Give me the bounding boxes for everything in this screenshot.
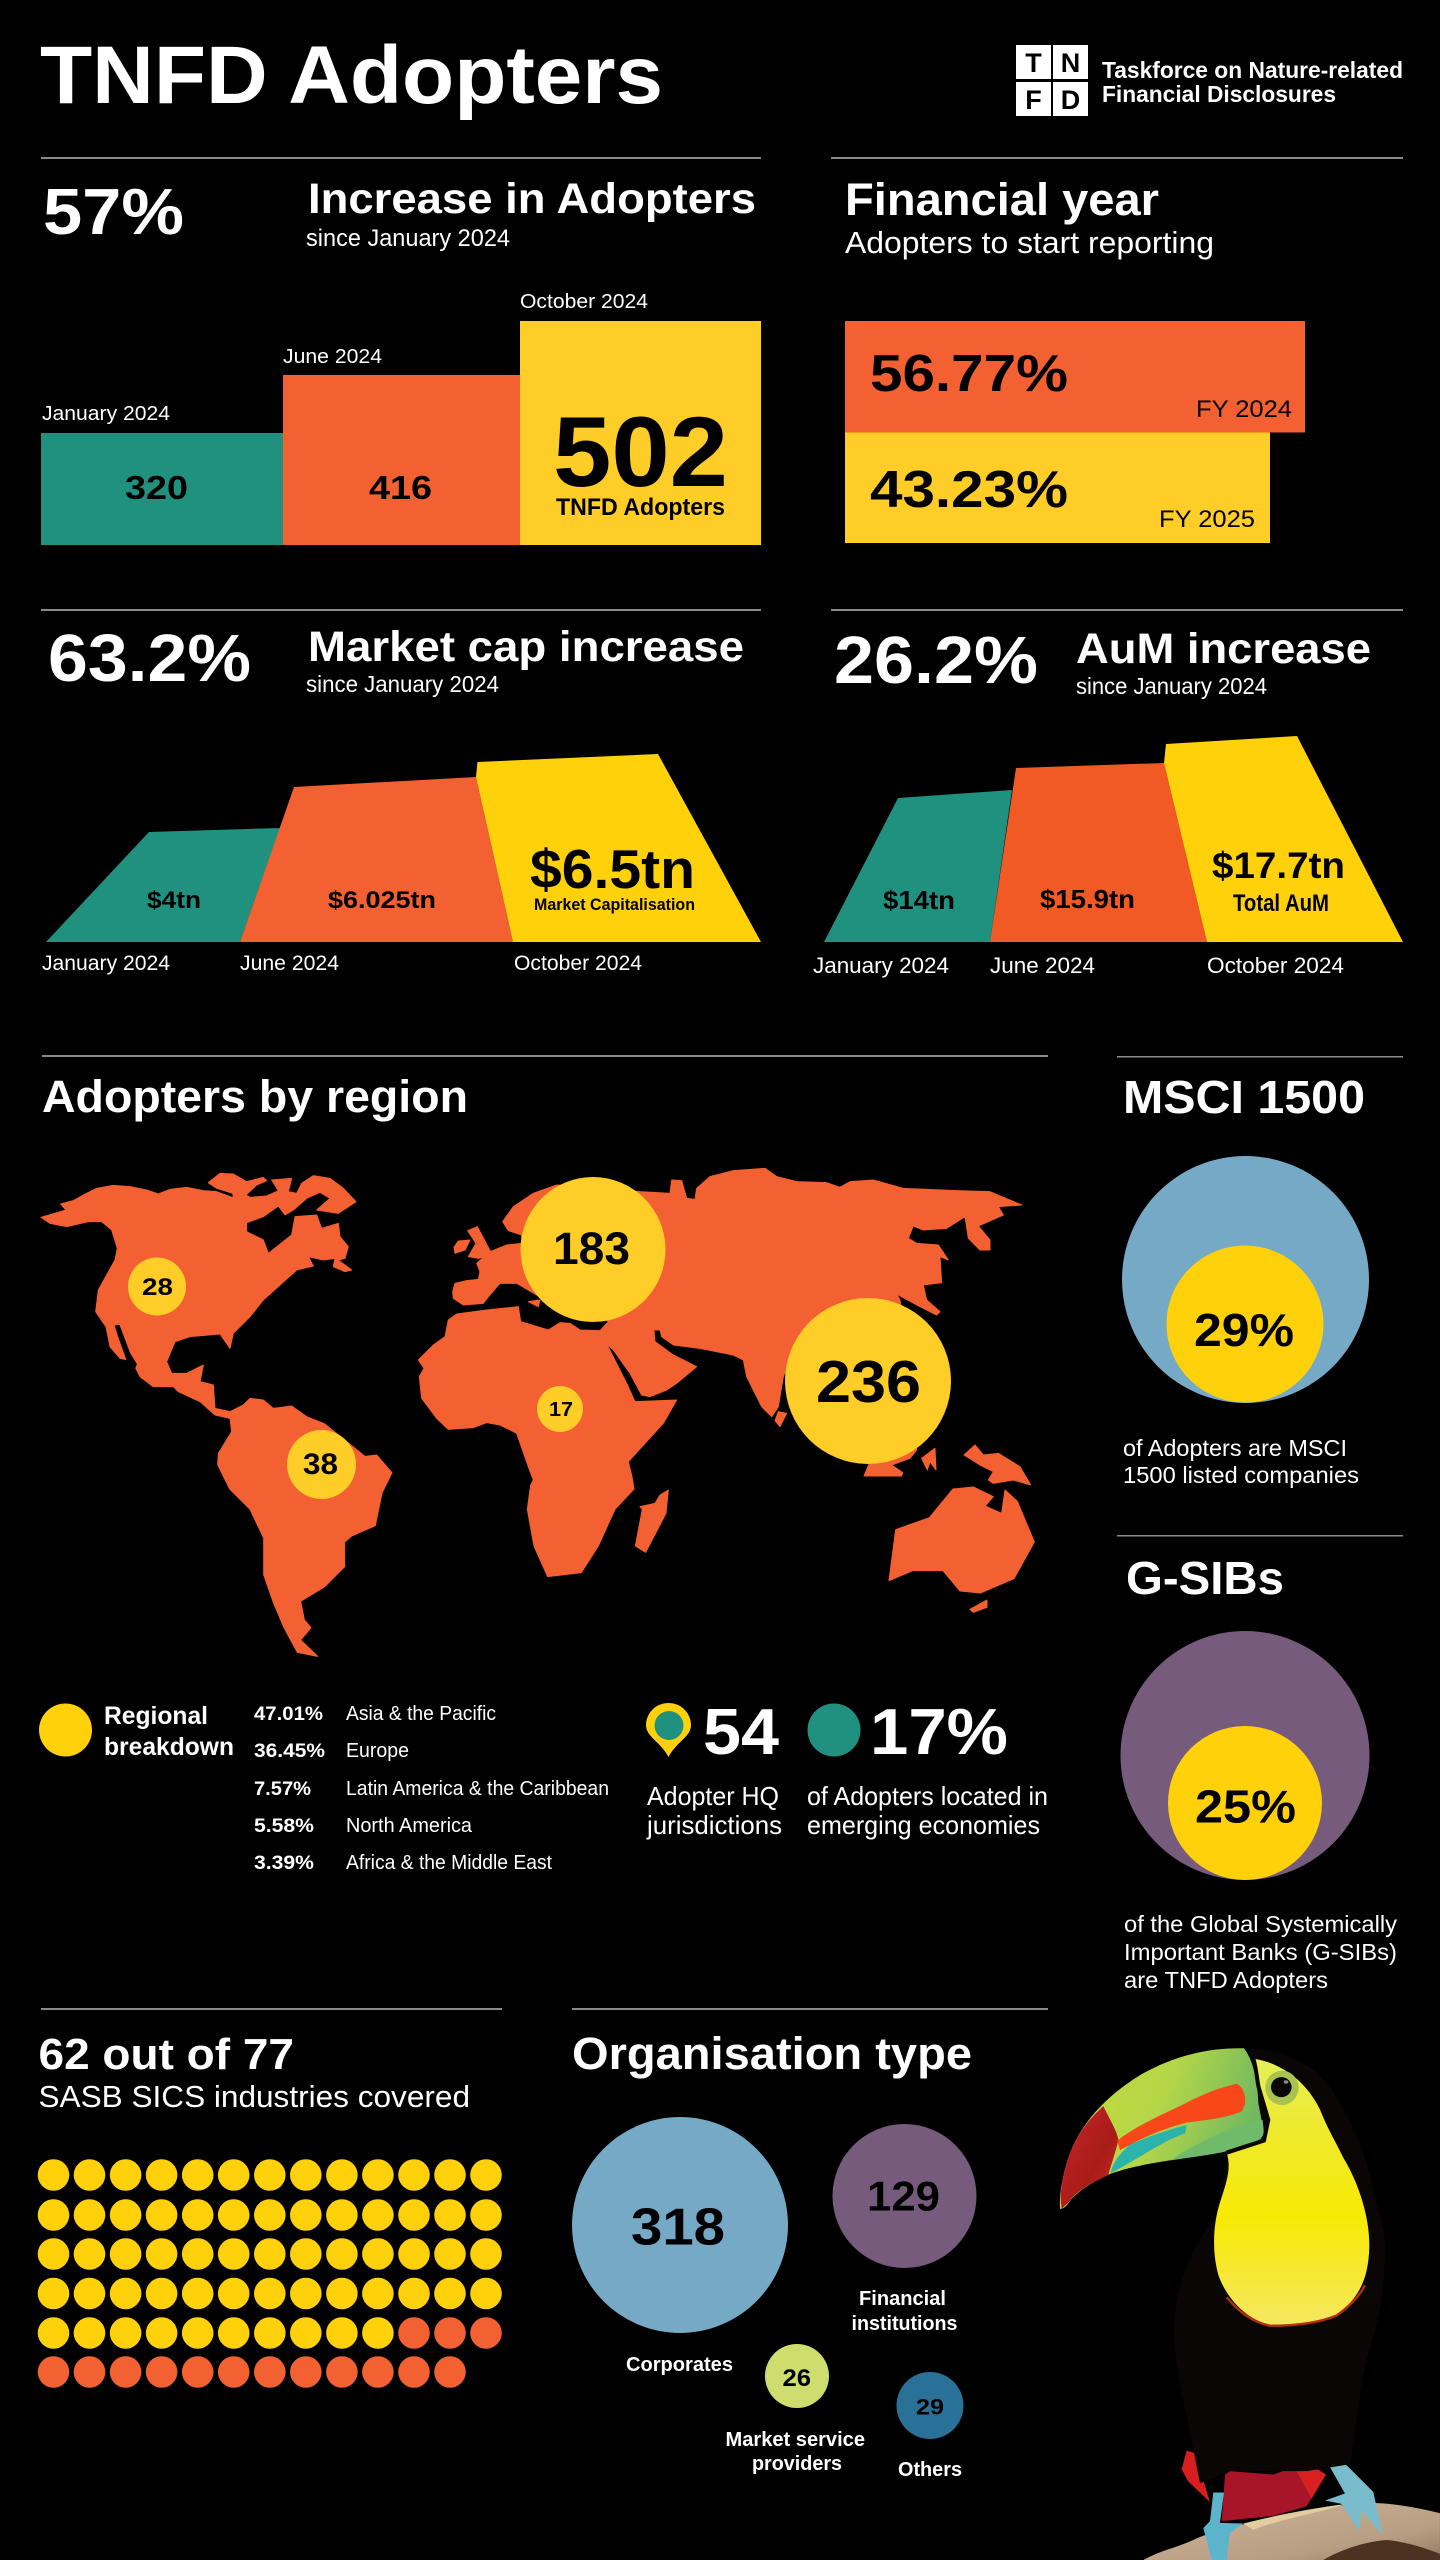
- bubble: market service providers: 26: [782, 2365, 811, 2392]
- bar: October 2024: [520, 291, 761, 545]
- bar: January 2024: January 2024: [42, 403, 170, 425]
- panel: increase in adopters: [41, 175, 761, 545]
- shape: October AuM: Total AuM: [1233, 890, 1329, 917]
- shape: October market cap: $6.5tn: [530, 838, 695, 900]
- list: region percentages: Africa & the Middle East: [346, 1852, 552, 1874]
- stat: adopter HQ jurisdictions: [646, 1695, 782, 1840]
- dot grid: 62 of 77: [38, 2159, 502, 2388]
- nested circles: 25%: 25%: [1195, 1780, 1296, 1832]
- bubble: Europe 183: 183: [553, 1223, 630, 1274]
- logo: TNFD: N: [1061, 48, 1080, 78]
- bar: FY 2025: [845, 432, 1270, 543]
- bar: June 2024: June 2024: [283, 346, 382, 368]
- map: Africa and islands: [418, 1227, 677, 1577]
- list: region percentages: [254, 1703, 609, 1874]
- shape: October AuM: [1164, 736, 1403, 942]
- panel: AuM increase: [813, 623, 1403, 978]
- title: TNFD Adopters: [40, 30, 663, 121]
- caption: [1123, 1435, 1359, 1488]
- axis labels: June 2024: [990, 953, 1095, 978]
- bubble: corporates: [572, 2117, 788, 2376]
- bubble: market service providers: Market service: [726, 2429, 865, 2451]
- shape: October market cap: Market Capitalisation: [534, 895, 695, 914]
- axis labels: [42, 952, 642, 975]
- caption: [807, 1781, 1048, 1840]
- axis labels: October 2024: [1207, 953, 1344, 978]
- caption: of Adopters located in: [807, 1781, 1048, 1811]
- subheading: SASB SICS industries covered: [38, 2079, 470, 2114]
- bar: FY 2025: FY 2025: [1159, 506, 1255, 533]
- heading: adopters by region: Adopters by region: [42, 1071, 468, 1122]
- heading: AuM increase: AuM increase: [1076, 625, 1371, 673]
- toucan bib: [1214, 2059, 1369, 2325]
- number: 17%: 17%: [870, 1695, 1008, 1768]
- bar: January 2024: 320: [125, 469, 188, 506]
- shape: October AuM: $17.7tn: [1212, 845, 1345, 886]
- bar: FY 2024: 56.77%: [870, 345, 1068, 403]
- subheading: adopters to start reporting: Adopters to start reporting: [845, 225, 1214, 260]
- bubble: Africa 17: [537, 1386, 583, 1432]
- list: region percentages: Asia & the Pacific: [346, 1703, 496, 1725]
- bar: June 2024: 416: [369, 469, 432, 506]
- caption: of the Global Systemically: [1124, 1911, 1398, 1937]
- heading: 62 out of 77: [38, 2030, 294, 2079]
- bubble: market service providers: providers: [752, 2453, 842, 2475]
- nested circles: 25%: [1120, 1631, 1370, 1880]
- stat: 26.2%: 26.2%: [834, 623, 1038, 698]
- bar: June 2024: [283, 346, 520, 545]
- caption: [1124, 1911, 1398, 1993]
- bubble: market service providers: [726, 2344, 865, 2475]
- caption: 1500 listed companies: [1123, 1462, 1359, 1488]
- icon: teal dot: [808, 1704, 860, 1756]
- shape: January AuM: [824, 790, 1012, 942]
- axis labels: June 2024: [240, 952, 339, 975]
- legend: regional breakdown: [39, 1702, 609, 1874]
- shape: June AuM: [990, 763, 1207, 942]
- number: 54: 54: [703, 1695, 779, 1768]
- caption: [646, 1781, 782, 1840]
- nested circles: 29%: [1122, 1156, 1369, 1403]
- list: region percentages: Latin America & the Caribbean: [346, 1778, 609, 1800]
- list: region percentages: 36.45%: [254, 1741, 325, 1762]
- bubble: Africa 17: 17: [549, 1399, 573, 1421]
- bubble: Europe 183: [520, 1177, 666, 1322]
- bar: FY 2024: [845, 321, 1305, 432]
- logo: TNFD: [1016, 45, 1403, 116]
- illustration: toucan: [1060, 2048, 1440, 2560]
- shape: January market cap: $4tn: [147, 887, 201, 914]
- panel: SASB SICS industries: [38, 2030, 502, 2388]
- heading: MSCI 1500: [1123, 1071, 1365, 1123]
- caption: jurisdictions: [646, 1810, 782, 1840]
- bubble: others: 29: [916, 2394, 944, 2420]
- axis labels: January 2024: [42, 952, 170, 975]
- heading: G-SIBs: [1126, 1552, 1284, 1604]
- map: Americas: [41, 1173, 392, 1656]
- toucan bill: [1060, 2048, 1264, 2209]
- legend title: breakdown: [104, 1733, 234, 1761]
- list: region percentages: 7.57%: [254, 1779, 311, 1800]
- shape: January market cap: [46, 828, 280, 942]
- heading: market cap increase: Market cap increase: [308, 623, 744, 671]
- toucan eye: [1265, 2071, 1299, 2105]
- map: Eurasia and Oceania: [453, 1168, 1034, 1612]
- bubble: others: [896, 2372, 964, 2481]
- bubble: others: Others: [898, 2459, 962, 2481]
- subheading: since January 2024: since January 2024: [1076, 673, 1267, 699]
- list: region percentages: North America: [346, 1815, 473, 1837]
- bubble: North America 28: [128, 1258, 186, 1316]
- logo: TNFD: T: [1025, 48, 1042, 78]
- bar: October 2024: 502: [553, 396, 728, 507]
- logo: TNFD: D: [1061, 85, 1080, 115]
- heading: Organisation type: [572, 2028, 972, 2079]
- stat: 57%: 57%: [43, 175, 184, 248]
- caption: Adopter HQ: [647, 1781, 779, 1811]
- list: region percentages: 47.01%: [254, 1704, 323, 1725]
- heading: increase in adopters: Increase in Adopters: [308, 175, 756, 223]
- caption: Important Banks (G-SIBs): [1124, 1939, 1397, 1965]
- bubble: Asia Pacific 236: 236: [816, 1349, 921, 1415]
- legend title: Regional: [104, 1702, 208, 1730]
- bubble: financial institutions: institutions: [852, 2313, 958, 2335]
- panel: market cap increase: [42, 621, 761, 975]
- bubble: financial institutions: Financial: [859, 2288, 946, 2310]
- bubble: Latin America 38: [287, 1430, 356, 1499]
- shape: January AuM: $14tn: [883, 885, 955, 915]
- bubble: Latin America 38: 38: [303, 1448, 338, 1481]
- list: region percentages: 5.58%: [254, 1816, 314, 1837]
- bar: October 2024: October 2024: [520, 291, 648, 313]
- heading: financial year: Financial year: [845, 174, 1159, 225]
- caption: emerging economies: [807, 1810, 1040, 1840]
- axis labels: January 2024: [813, 953, 949, 978]
- bar: January 2024: [41, 403, 283, 545]
- bubble: corporates: Corporates: [626, 2354, 733, 2376]
- subheading: since January 2024: since January 2024: [306, 671, 499, 697]
- nested circles: 29%: 29%: [1194, 1304, 1294, 1356]
- list: region percentages: 3.39%: [254, 1853, 314, 1874]
- bar: FY 2024: FY 2024: [1196, 396, 1292, 423]
- caption: of Adopters are MSCI: [1123, 1435, 1347, 1461]
- panel: financial year: [845, 174, 1305, 543]
- stat: emerging economies: [807, 1695, 1048, 1840]
- bar: October 2024: TNFD Adopters: [556, 494, 725, 521]
- logo: TNFD: F: [1025, 85, 1042, 115]
- subheading: since January 2024: since January 2024: [306, 225, 510, 252]
- icon: yellow dot: [39, 1704, 92, 1756]
- panel: organisation type: [572, 2028, 976, 2481]
- icon: map pin: [646, 1703, 691, 1757]
- axis labels: October 2024: [514, 952, 642, 975]
- shape: June market cap: $6.025tn: [328, 887, 436, 914]
- list: region percentages: Europe: [346, 1740, 409, 1762]
- world map: [41, 1168, 1034, 1656]
- shape: October market cap: [476, 754, 761, 942]
- bar: FY 2025: 43.23%: [870, 461, 1068, 519]
- bubble: Asia Pacific 236: [785, 1298, 951, 1464]
- caption: are TNFD Adopters: [1124, 1967, 1328, 1993]
- axis labels: [813, 953, 1344, 978]
- stat: 63.2%: 63.2%: [48, 621, 251, 696]
- logo: TNFD: Financial Disclosures: [1102, 81, 1336, 107]
- panel: MSCI 1500: [1122, 1071, 1369, 1488]
- bubble: corporates: 318: [631, 2198, 725, 2256]
- logo: TNFD: Taskforce on Nature-related: [1102, 57, 1403, 83]
- shape: June AuM: $15.9tn: [1040, 884, 1135, 914]
- bubble: financial institutions: [832, 2124, 976, 2335]
- panel: G-SIBs: [1120, 1552, 1398, 1993]
- shape: June market cap: [240, 777, 513, 942]
- legend title: [104, 1702, 234, 1761]
- bubble: North America 28: 28: [142, 1274, 173, 1301]
- bubble: financial institutions: 129: [867, 2172, 940, 2220]
